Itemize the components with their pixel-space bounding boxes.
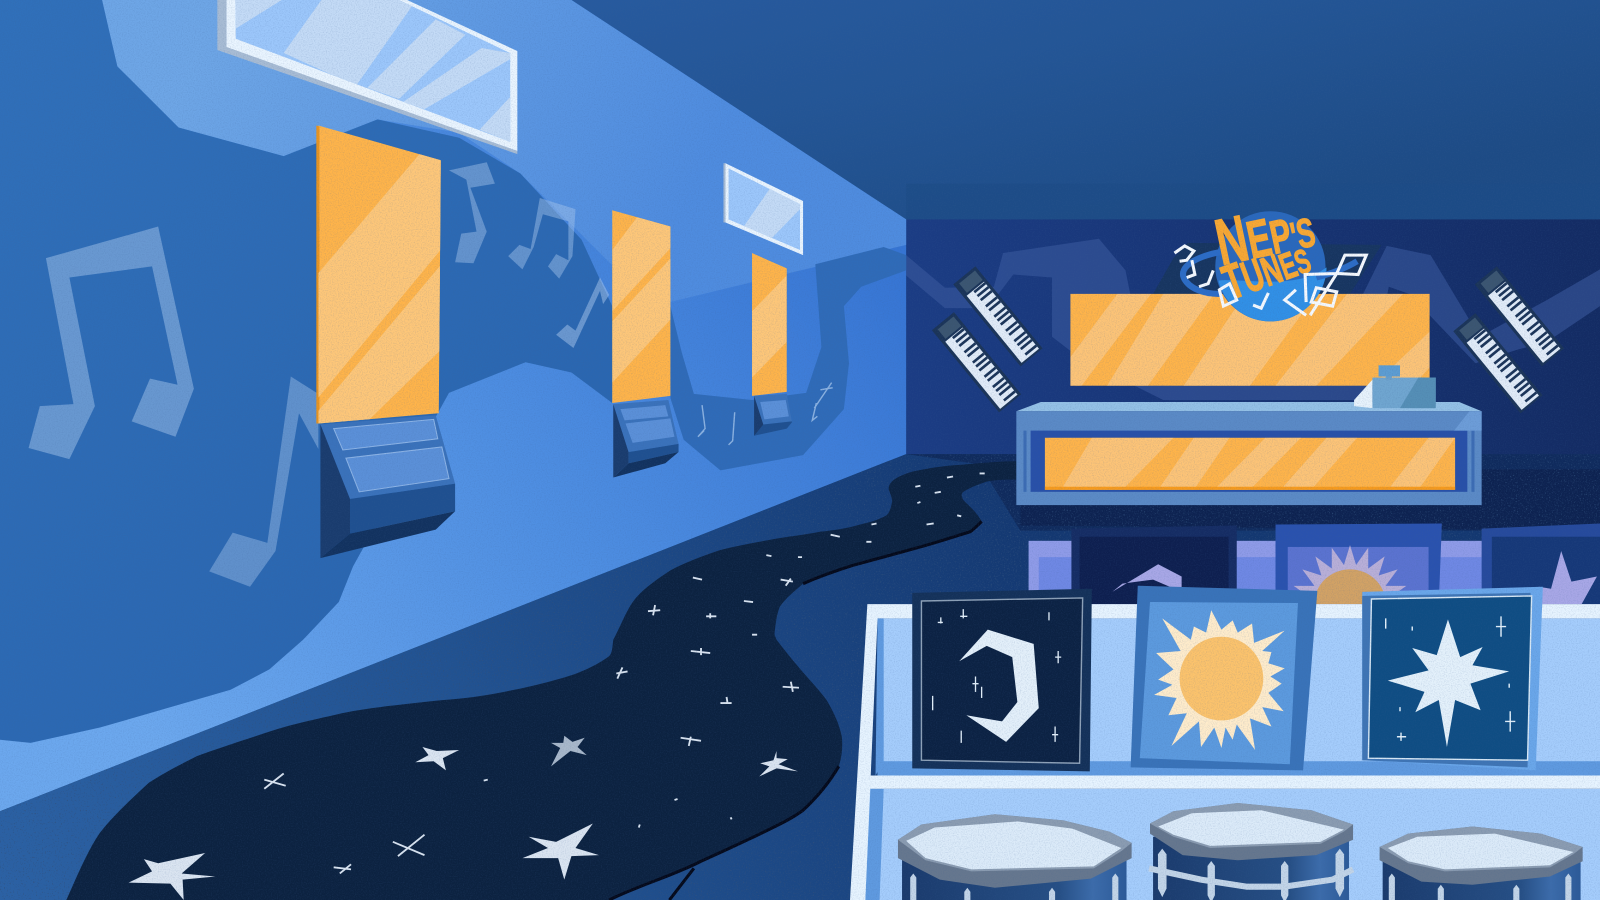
keyboard, wall left lower: [932, 312, 1021, 412]
counter: [1016, 402, 1482, 505]
keyboard, wall right upper: [1475, 266, 1564, 366]
carpet stars: [129, 736, 798, 900]
pillar 2 kiosk: [613, 400, 679, 478]
left wall: [0, 0, 906, 811]
back shelf: [1029, 541, 1600, 604]
wall shadow, U-shaped: [670, 247, 906, 470]
carpet crosses: [264, 473, 985, 873]
logo notes: [1174, 246, 1366, 315]
keyboard, wall right lower: [1453, 313, 1543, 413]
floor: [0, 454, 1600, 900]
note: small beamed: [508, 198, 576, 279]
front art: moon: [912, 589, 1092, 771]
notes: tiny outlines: [698, 383, 833, 445]
logo wordmark: TUNES: [1216, 230, 1317, 310]
logo wordmark: [1209, 187, 1320, 310]
sign panel: [1070, 294, 1430, 386]
pillar 1 kiosk: [320, 415, 455, 558]
back art: moon: [1071, 526, 1237, 604]
starry carpet: [66, 461, 1016, 900]
pillar 1 mirror: [316, 126, 449, 423]
moon sparkles: [933, 609, 1061, 743]
logo starfield backing: [1153, 243, 1382, 294]
drum 2: [1149, 803, 1353, 900]
back wall with wave shadow: [906, 219, 1600, 464]
note: large beamed: [29, 227, 194, 459]
front art: star: [1362, 587, 1543, 770]
drum 3: [1380, 827, 1583, 900]
cash register: [1354, 365, 1436, 408]
note: small single: [556, 278, 609, 348]
keyboard, wall left upper: [953, 266, 1043, 366]
front shelf: [850, 604, 1600, 900]
note: single near first pillar: [449, 162, 495, 263]
ceiling: [0, 0, 1600, 220]
pillar 2 mirror: [612, 210, 673, 403]
back art: star: [1482, 523, 1600, 604]
logo planet: [1215, 211, 1326, 321]
drum 1: [898, 814, 1132, 900]
top mirror, small: [723, 163, 803, 255]
logo ring: [1183, 252, 1357, 294]
wall shadow, large: [0, 0, 612, 743]
front art: sun: [1131, 586, 1317, 770]
music notes on the wall: [29, 162, 833, 587]
pillar 3 kiosk: [754, 394, 792, 436]
logo: Nep's Tunes: [1174, 187, 1366, 321]
top mirror, large: [217, 0, 517, 154]
back art: sun: [1276, 524, 1442, 604]
star sparkles: [1386, 616, 1515, 741]
logo wordmark: NEP'S: [1209, 187, 1320, 279]
wall light patch at top: [102, 0, 906, 306]
note: tall single: [209, 377, 318, 587]
pillar 3 mirror: [752, 253, 787, 396]
drum 2 hoop: [1149, 868, 1353, 887]
counter display panel: [1045, 438, 1455, 490]
